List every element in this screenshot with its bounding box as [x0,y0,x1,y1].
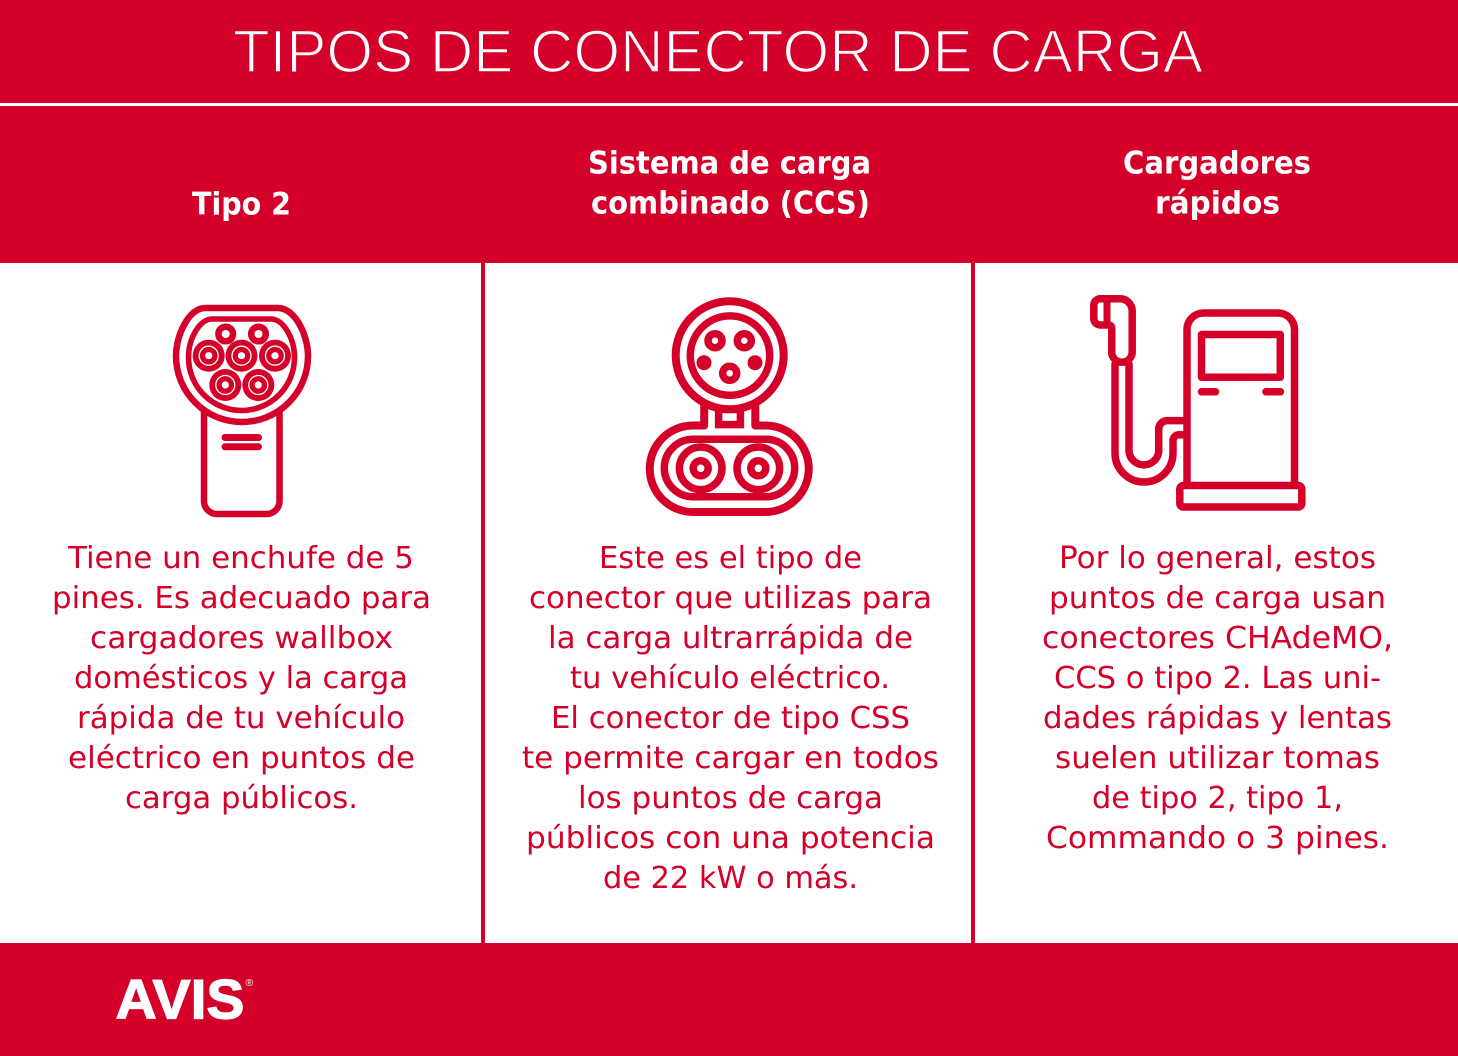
text block: fast chargers: de tipo 2, tipo 1, [1092,781,1343,816]
heading: Cargadores rápidos [1123,146,1311,222]
text block: fast chargers: Commando o 3 pines. [1046,821,1389,856]
heading: Cargadores rápidos: Cargadores [1123,146,1311,182]
text block: Tipo 2: domésticos y la carga [74,661,408,696]
text block: Tipo 2: cargadores wallbox [90,621,393,656]
text block: Tipo 2: rápida de tu vehículo [77,701,405,736]
text block: CCS: conector que utilizas para [529,581,932,616]
text block: fast chargers: puntos de carga usan [1049,581,1386,616]
text block: fast chargers: dades rápidas y lentas [1043,701,1392,736]
logo: AVIS: ® [246,977,254,989]
panel: header band [0,0,1458,263]
text block: CCS: públicos con una potencia [526,821,935,856]
text block: Tipo 2: carga públicos. [125,781,358,816]
text block: CCS: de 22 kW o más. [603,861,858,896]
text block: CCS: El conector de tipo CSS [551,701,910,736]
text block: CCS: Este es el tipo de [599,541,862,576]
heading: Sistema de carga combinado (CCS): Sistema de carga [588,146,871,182]
icon: fast charger station [1094,299,1302,507]
panel: column dividers [481,263,975,943]
panel: footer band [0,943,1458,1056]
text block: Tipo 2: eléctrico en puntos de [68,741,415,776]
text block: CCS [522,541,939,896]
icon: CCS connector [650,301,809,512]
text block: fast chargers [1042,541,1393,856]
heading: Sistema de carga combinado (CCS): combinado (CCS) [591,186,870,222]
text block: CCS: tu vehículo eléctrico. [570,661,890,696]
text block: fast chargers: CCS o tipo 2. Las uni- [1054,661,1381,696]
text block: Tipo 2: pines. Es adecuado para [52,581,431,616]
logo: AVIS: AVIS [116,968,244,1030]
text block: Tipo 2: Tiene un enchufe de 5 [67,541,414,576]
text block: fast chargers: Por lo general, estos [1059,541,1376,576]
text block: fast chargers: conectores CHAdeMO, [1042,621,1393,656]
title: TIPOS DE CONECTOR DE CARGA [233,18,1203,85]
heading: Sistema de carga combinado (CCS) [588,146,871,222]
text block: CCS: los puntos de carga [578,781,883,816]
icon: type 2 connector [176,308,308,514]
text block: CCS: te permite cargar en todos [522,741,939,776]
text block: fast chargers: suelen utilizar tomas [1055,741,1380,776]
heading: Tipo 2: Tipo 2 [192,186,291,222]
heading: Cargadores rápidos: rápidos [1155,186,1280,222]
text block: CCS: la carga ultrarrápida de [548,621,913,656]
text block: Tipo 2 [52,541,431,816]
